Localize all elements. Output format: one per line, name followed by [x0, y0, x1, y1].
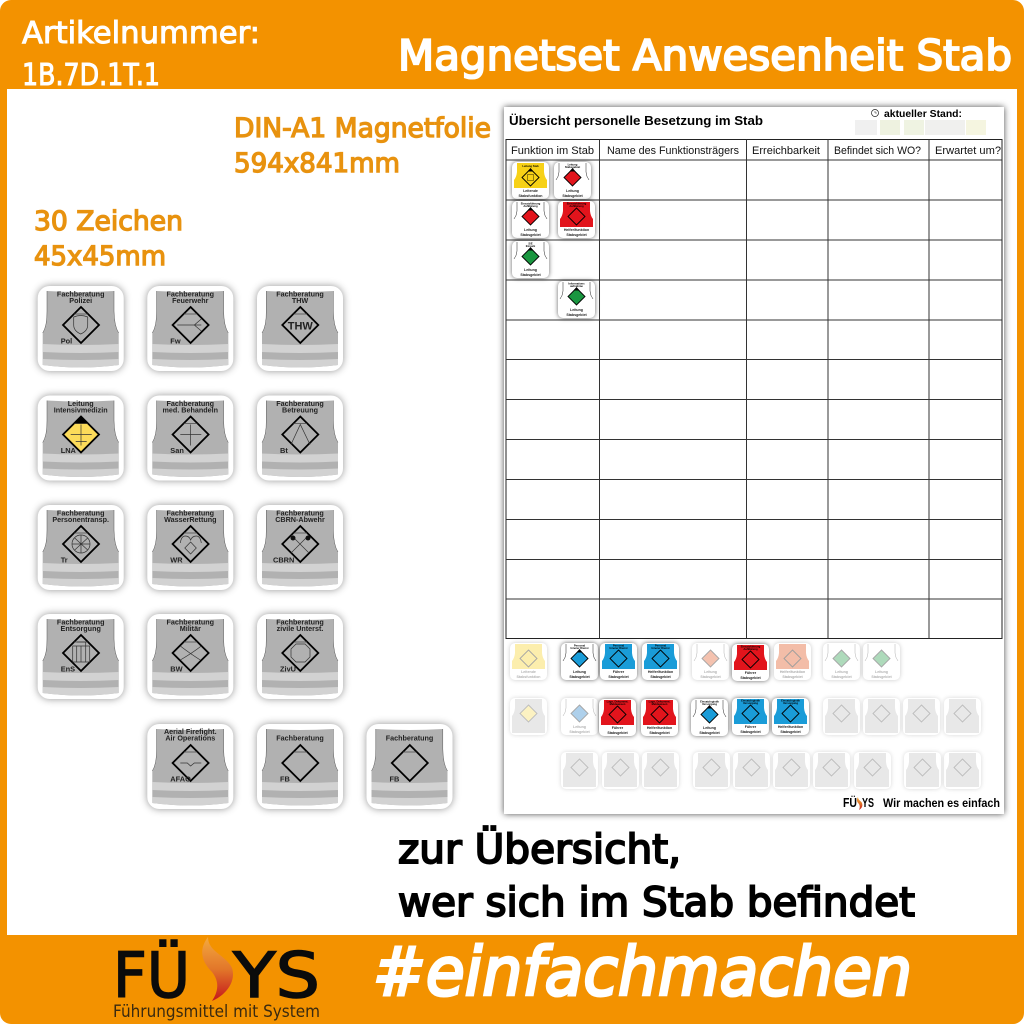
placed magnet: green white vest: Leitung	[524, 268, 537, 272]
magnet: Personentransport	[38, 505, 124, 590]
spare magnets row 1: Innerer Dienst	[570, 646, 589, 650]
magnet: Betreuung: Betreuung	[282, 406, 318, 414]
placed magnet: red white vest 2: Aufklärung	[523, 204, 538, 208]
magnet: Militär: BW	[170, 664, 183, 674]
slogan on sheet: Wir machen es einfach	[883, 796, 1000, 810]
spare magnets row 1: Stabsgebiet	[871, 675, 892, 679]
placed magnet: green white vest 2: Stabsgebiet	[566, 313, 587, 317]
magnet: Aerial Firefighting: Aerial Firefight.	[164, 727, 217, 736]
magnet: Personentransport: Tr	[61, 556, 68, 564]
spare magnets row 1: Personal	[613, 644, 624, 648]
placed magnet: green white vest: Einsatz	[526, 244, 536, 248]
magnet: Fachberatung FB 2	[366, 724, 452, 809]
magnet: Betreuung	[257, 396, 343, 480]
placed magnet: red white vest: Stabsgebiet	[562, 194, 583, 198]
table: Befindet sich WO?	[834, 145, 921, 157]
table: Name des Funktionsträgers	[607, 145, 739, 157]
caption: wer sich im Stab befindet	[398, 880, 915, 926]
magnet: THW: Fachberatung	[276, 290, 324, 298]
spare magnets row 3	[561, 752, 981, 789]
spare magnets row 1: Leitung	[704, 670, 717, 674]
small logo on sheet: FÜ	[843, 795, 857, 810]
spare magnets row 1: Leitung	[573, 670, 586, 674]
placed magnet: green white vest 2: Informations	[568, 282, 585, 286]
spare magnets row 2: Helfer/funktion	[647, 726, 672, 730]
spare magnets row 2: Versorgung	[783, 701, 798, 705]
magnet: Fachberatung FB 1: FB	[280, 774, 290, 784]
placed magnet: red white vest: Leitung	[568, 162, 578, 166]
foil size label: 594x841mm	[234, 148, 400, 179]
placed magnet: red white vest 2	[512, 201, 549, 238]
spare magnets row 2: Lage, Dokument.	[607, 700, 629, 704]
table: Erwartet um?	[935, 145, 1001, 157]
magnet: Feuerwehr: Feuerwehr	[172, 296, 209, 305]
placed magnet: red white vest: Stabsgebiet	[565, 165, 580, 169]
spare magnets row 2: Helfer/funktion	[778, 725, 803, 729]
spare magnets row 2: Einsatzlogistik	[781, 698, 800, 702]
magnet: Aerial Firefighting	[147, 724, 233, 809]
magnet: Polizei	[38, 286, 124, 371]
magnet: Polizei: Pol	[61, 336, 72, 346]
magnet: CBRN-Abwehr	[257, 505, 343, 590]
magnet: THW: THW	[288, 320, 313, 332]
spare magnets row 2: Stabsgebiet	[569, 730, 590, 734]
magnet: Entsorgung	[38, 614, 124, 699]
placed magnet: green white vest 2	[558, 281, 595, 318]
spare magnets row 1: Stabsgebiet	[608, 675, 629, 679]
spare magnets row 2: Stabsgebiet	[740, 730, 761, 734]
spare magnets row 1: Stabsgebiet	[569, 675, 590, 679]
placed magnet: yellow: Leitende	[523, 189, 538, 193]
magnet: CBRN-Abwehr: CBRN	[273, 556, 294, 564]
magnet: Entsorgung: Fachberatung	[57, 618, 104, 626]
placed magnet: green white vest: Stabsgebiet	[520, 273, 541, 277]
spare magnets row 1: Stabsgebiet	[650, 675, 671, 679]
small logo on sheet	[843, 795, 874, 810]
spare magnets row 1: Innerer Dienst	[651, 646, 670, 650]
placed magnet: red vest	[558, 201, 595, 238]
spare magnets row 1: Aufklärung	[743, 647, 758, 651]
spare magnets row 1: Führer	[613, 670, 625, 674]
placed magnet: red white vest	[554, 162, 591, 199]
magnet: Fachberatung FB 1	[257, 724, 343, 809]
magnet: Militär: Militär	[180, 624, 201, 633]
table: Erreichbarkeit	[752, 145, 820, 157]
spare magnets row 2: Stabsgebiet	[780, 730, 801, 734]
placed magnet: red white vest: Leitung	[566, 189, 579, 193]
article number	[22, 16, 260, 93]
current status field	[855, 108, 986, 135]
spare magnets row 1: Leitung	[875, 670, 888, 674]
magnet: CBRN-Abwehr: CBRN-Abwehr	[275, 515, 325, 524]
magnet count label	[34, 206, 183, 272]
spare magnets row 1: Führer	[745, 671, 757, 675]
magnet: THW: THW	[292, 296, 308, 305]
magnet: Fachberatung FB 2: FB	[390, 774, 399, 784]
placed magnet: red vest: Stabsgebiet	[566, 233, 587, 237]
magnet: Feuerwehr	[147, 286, 233, 371]
magnet: WasserRettung: WasserRettung	[164, 515, 217, 524]
spare magnets row 2: Stabsgebiet	[649, 731, 670, 735]
spare magnets row 1: Helfer/funktion	[780, 670, 805, 674]
placed magnet: red vest: Einsatzführung	[567, 202, 587, 206]
table	[506, 140, 1002, 638]
logo: FÜSYS: YS	[232, 939, 320, 1012]
spare magnets row 1: Stabsgebiet	[700, 675, 721, 679]
spare magnets row 2: Leitung	[573, 725, 586, 729]
magnet: Militär	[147, 614, 233, 699]
small logo on sheet: YS	[862, 795, 874, 810]
icon: flame	[202, 937, 233, 1001]
magnet: zivile Unterstützung: Fachberatung	[276, 618, 324, 626]
placed magnet: red white vest 2: Leitung	[524, 228, 537, 232]
spare magnets row 2	[510, 698, 981, 736]
panel: whiteboard sheet	[504, 107, 1004, 814]
spare magnets row 2: Meldewesen	[610, 702, 626, 706]
magnet: Leitung Intensivmedizin: Leitung	[68, 399, 94, 408]
magnet: Aerial Firefighting: Air Operations	[165, 734, 215, 742]
magnet: med. Behandeln	[147, 396, 233, 480]
magnet: Entsorgung: EnS	[61, 664, 75, 674]
spare magnets row 2: Stabsgebiet	[607, 731, 628, 735]
spare magnets row 2: Führer	[612, 726, 624, 730]
placed magnet: green white vest: S/E	[528, 242, 533, 246]
magnet: Polizei: Polizei	[69, 296, 92, 305]
spare magnets row 2: Lage, Dokument.	[649, 700, 671, 704]
magnet count label: 30 Zeichen	[34, 206, 183, 237]
logo: FÜSYS	[113, 937, 320, 1022]
spare magnets row 2: Versorgung	[743, 701, 758, 705]
spare magnets row 1: Stabsgebiet	[740, 676, 761, 680]
magnet: CBRN-Abwehr: Fachberatung	[276, 508, 324, 518]
placed magnet: yellow	[512, 162, 549, 199]
spare magnets row 2: Einsatzlogistik	[741, 698, 760, 702]
spare magnets row 1: Stabsgebiet	[831, 675, 852, 679]
spare magnets row 1: Innerer Dienst	[609, 646, 628, 650]
magnet: WasserRettung	[147, 505, 233, 590]
spare magnets row 2: Einsatzlogistik	[700, 700, 719, 704]
magnet: Personentransport: Fachberatung	[57, 508, 104, 518]
spare magnets row 1: Leitung	[835, 670, 848, 674]
placed magnet: yellow: Leitung Stab	[522, 164, 539, 168]
spare magnets row 1: Stabsfunktion	[517, 675, 540, 679]
magnet: Personentransport: Personentransp.	[52, 515, 109, 524]
magnet: Polizei: Fachberatung	[57, 290, 104, 298]
placed magnet: red vest: Helfer/funktion	[564, 228, 589, 232]
magnet: Betreuung: Fachberatung	[276, 399, 324, 408]
caption	[398, 825, 915, 926]
spare magnets row 1: Leitende	[521, 670, 536, 674]
spare magnets row 1	[510, 643, 900, 681]
magnet: Betreuung: Bt	[280, 446, 288, 455]
magnet: Fachberatung FB 2: Fachberatung	[386, 734, 433, 743]
magnet: Leitung Intensivmedizin	[38, 396, 124, 480]
current status field: aktueller Stand:	[884, 108, 962, 120]
logo: FÜSYS: Führungsmittel mit System	[113, 1002, 320, 1022]
magnet: med. Behandeln: Fachberatung	[167, 399, 214, 408]
magnet: Entsorgung: Entsorgung	[61, 624, 101, 633]
spare magnets row 1: Personal	[655, 644, 666, 648]
magnet: THW	[257, 286, 343, 371]
magnet: med. Behandeln: San	[170, 446, 184, 455]
placed magnet: green white vest 2: aufnahme	[570, 284, 583, 288]
magnet: med. Behandeln: med. Behandeln	[163, 406, 218, 414]
spare magnets row 2: Stabsgebiet	[699, 731, 720, 735]
magnet: WasserRettung: Fachberatung	[167, 508, 214, 518]
magnet: WasserRettung: WR	[170, 556, 183, 564]
spare magnets row 2: Meldewesen	[652, 702, 668, 706]
caption: zur Übersicht,	[398, 825, 681, 873]
article number: 1B.7D.1T.1	[22, 58, 160, 93]
magnet: zivile Unterstützung	[257, 614, 343, 699]
placed magnet: red vest: Aufklärung	[569, 204, 584, 208]
magnet: zivile Unterstützung: ZivU	[280, 664, 296, 674]
table: Funktion im Stab	[511, 145, 594, 157]
spare magnets row 2: Führer	[745, 725, 757, 729]
logo: FÜSYS: FÜ	[113, 939, 190, 1012]
foil size label	[234, 113, 491, 179]
magnet: Fachberatung FB 1: Fachberatung	[276, 734, 324, 743]
magnet: Feuerwehr: Fachberatung	[167, 290, 214, 298]
spare magnets row 1: Helfer/funktion	[648, 670, 673, 674]
hashtag: #einfachmachen	[373, 933, 912, 1011]
placed magnet: red white vest 2: Einsatzführung	[521, 202, 541, 206]
magnet: Leitung Intensivmedizin: LNA	[61, 446, 77, 455]
magnet count label: 45x45mm	[34, 241, 166, 272]
spare magnets row 1: Personal	[574, 644, 585, 648]
spare magnets row 2: Leitung	[703, 726, 716, 730]
placed magnet: green white vest	[512, 241, 549, 278]
placed magnet: yellow: Stabsfunktion	[519, 194, 542, 198]
spare magnets row 2: Versorgung	[702, 702, 717, 706]
article number: Artikelnummer:	[22, 16, 260, 51]
magnet: Leitung Intensivmedizin: Intensivmedizin	[54, 406, 108, 414]
magnet: Militär: Fachberatung	[167, 618, 214, 626]
magnet: Feuerwehr: Fw	[170, 336, 181, 346]
foil size label: DIN-A1 Magnetfolie	[234, 113, 491, 144]
magnet: zivile Unterstützung: zivile Unterst.	[277, 624, 323, 633]
placed magnet: green white vest 2: Leitung	[570, 308, 583, 312]
placed magnet: red white vest 2: Stabsgebiet	[520, 233, 541, 237]
spare magnets row 1: Einsatzführung	[741, 644, 761, 648]
spare magnets row 1: Stabsgebiet	[782, 675, 803, 679]
main title: Magnetset Anwesenheit Stab	[398, 31, 1012, 80]
sheet title: Übersicht personelle Besetzung im Stab	[509, 113, 763, 128]
magnet: Aerial Firefighting: AFAO	[170, 774, 191, 784]
